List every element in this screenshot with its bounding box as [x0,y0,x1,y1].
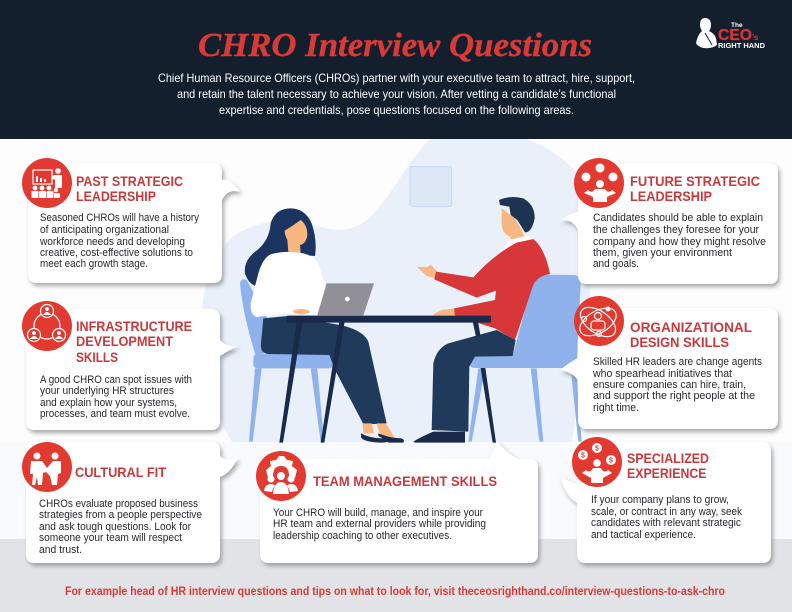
card: past strategic leadership [22,158,240,283]
logo: CEO [718,27,752,44]
body text: scale, or contract in any way, seek [591,506,742,518]
heading: SPECIALIZED [627,451,709,466]
heading: DEVELOPMENT [76,334,174,349]
body text [40,374,192,420]
heading: INFRASTRUCTURE [76,319,192,334]
heading [630,174,760,204]
icon: team with gear [256,451,306,501]
intro text: Chief Human Resource Officers (CHROs) partner with your executive team to attract, hire, support, [158,71,635,85]
woman's hand [293,309,310,314]
body text: strategies from a people perspective [39,509,202,521]
body text: Your CHRO will build, manage, and inspire your [273,507,483,519]
header band [0,0,792,139]
heading: ORGANIZATIONAL [630,320,752,335]
woman's chair [240,279,333,442]
man's hair [499,197,535,232]
illustration: interview scene [240,167,582,443]
heading [627,451,709,481]
footer band [0,539,792,612]
heading: SKILLS [76,350,118,365]
icon: juggling dollars: $ [581,452,585,460]
logo: ’s [752,33,759,42]
heading [76,174,183,204]
woman's feet and shoes [361,423,404,443]
body text: A good CHRO can spot issues with [40,374,192,386]
body text: and support the right people at the [593,390,755,402]
body text: CHROs evaluate proposed business [39,498,198,510]
body text: creative, cost-effective solutions to [40,247,193,259]
body text: Skilled HR leaders are change agents [593,356,762,368]
woman's trousers [261,316,387,424]
body text: and ask tough questions. Look for [39,521,191,533]
body text: company and how they might resolve [593,236,766,248]
body text: processes, and team must evolve. [40,408,190,420]
intro text: and retain the talent necessary to achieve your vision. After vetting a candidate’s functional [177,87,616,101]
title: CHRO Interview Questions [198,27,592,64]
body text: right time. [593,402,639,414]
intro text [158,71,635,117]
body text [273,507,486,542]
body text: HR team and external providers while providing [273,518,486,530]
body text: Candidates should be able to explain [593,212,763,224]
icon: person in orbit [574,296,624,346]
body text: leadership coaching to other executives. [273,530,452,542]
card: future strategic leadership [560,158,778,284]
man's trousers [432,330,516,432]
heading: PAST STRATEGIC [76,174,183,189]
icon: two people shaking hands [22,442,72,492]
body text: who spearhead initiatives that [592,368,732,380]
body text: If your company plans to grow, [591,494,729,506]
body text [591,494,742,541]
body text: ensure companies can hire, train, [593,379,746,391]
body text [39,498,202,556]
icon: juggling dollars: $ [609,458,613,464]
card: team management skills [256,441,538,563]
heading [630,320,752,350]
icon: juggling ideas [574,158,624,208]
body text: the challenges they foresee for your [593,224,759,236]
man's skin [417,208,525,316]
body text: Seasoned CHROs will have a history [40,212,199,224]
icon: juggling dollars [572,437,622,487]
icon: juggling dollars: $ [595,446,599,452]
body text [593,212,766,270]
body text [39,212,199,270]
logo [696,18,765,50]
logo: RIGHT HAND [718,43,765,50]
body text: and explain how your systems, [40,397,177,409]
background blob [202,139,590,442]
heading [76,319,192,365]
card: specialized experience [560,437,771,563]
icon: presenter and audience [22,158,72,208]
body text: workforce needs and developing [39,236,185,248]
card: infrastructure development skills [22,301,238,430]
laptop [317,283,374,315]
body text: them, given your environment [593,247,732,259]
body text: candidates with relevant strategic [591,517,741,529]
woman's neck and face [285,220,307,254]
heading: LEADERSHIP [630,189,712,204]
man's sweater [434,239,550,340]
table [279,316,496,443]
body text: and trust. [39,544,82,556]
heading: TEAM MANAGEMENT SKILLS [313,474,497,489]
body text: and tactical experience. [591,529,696,541]
body text: someone your team will respect [39,532,182,544]
heading: EXPERIENCE [627,466,706,481]
body text: of anticipating organizational [40,224,169,236]
heading: FUTURE STRATEGIC [630,174,760,189]
heading: LEADERSHIP [76,189,156,204]
intro text: expertise and credentials, pose questions focused on the following areas. [219,103,574,117]
card: organizational design skills [560,296,778,429]
man's collar [493,236,533,260]
heading: DESIGN SKILLS [630,335,729,350]
body text: and goals. [593,258,639,270]
man's shoes [413,432,465,443]
wall clock [410,167,452,207]
icon: connected team [22,301,72,351]
logo: The [731,22,743,29]
woman's hair back [245,208,316,286]
heading: CULTURAL FIT [75,465,167,480]
body text [592,356,762,414]
woman's blouse [251,252,326,317]
card: cultural fit [22,442,238,563]
body text: your underlying HR structures [40,385,174,397]
footer link text: For example head of HR interview questions and tips on what to look for, visit theceosrighthand.co/interview-questions-to-ask-chro [65,586,725,598]
man's chair [468,275,582,442]
body text: meet each growth stage. [40,258,148,270]
